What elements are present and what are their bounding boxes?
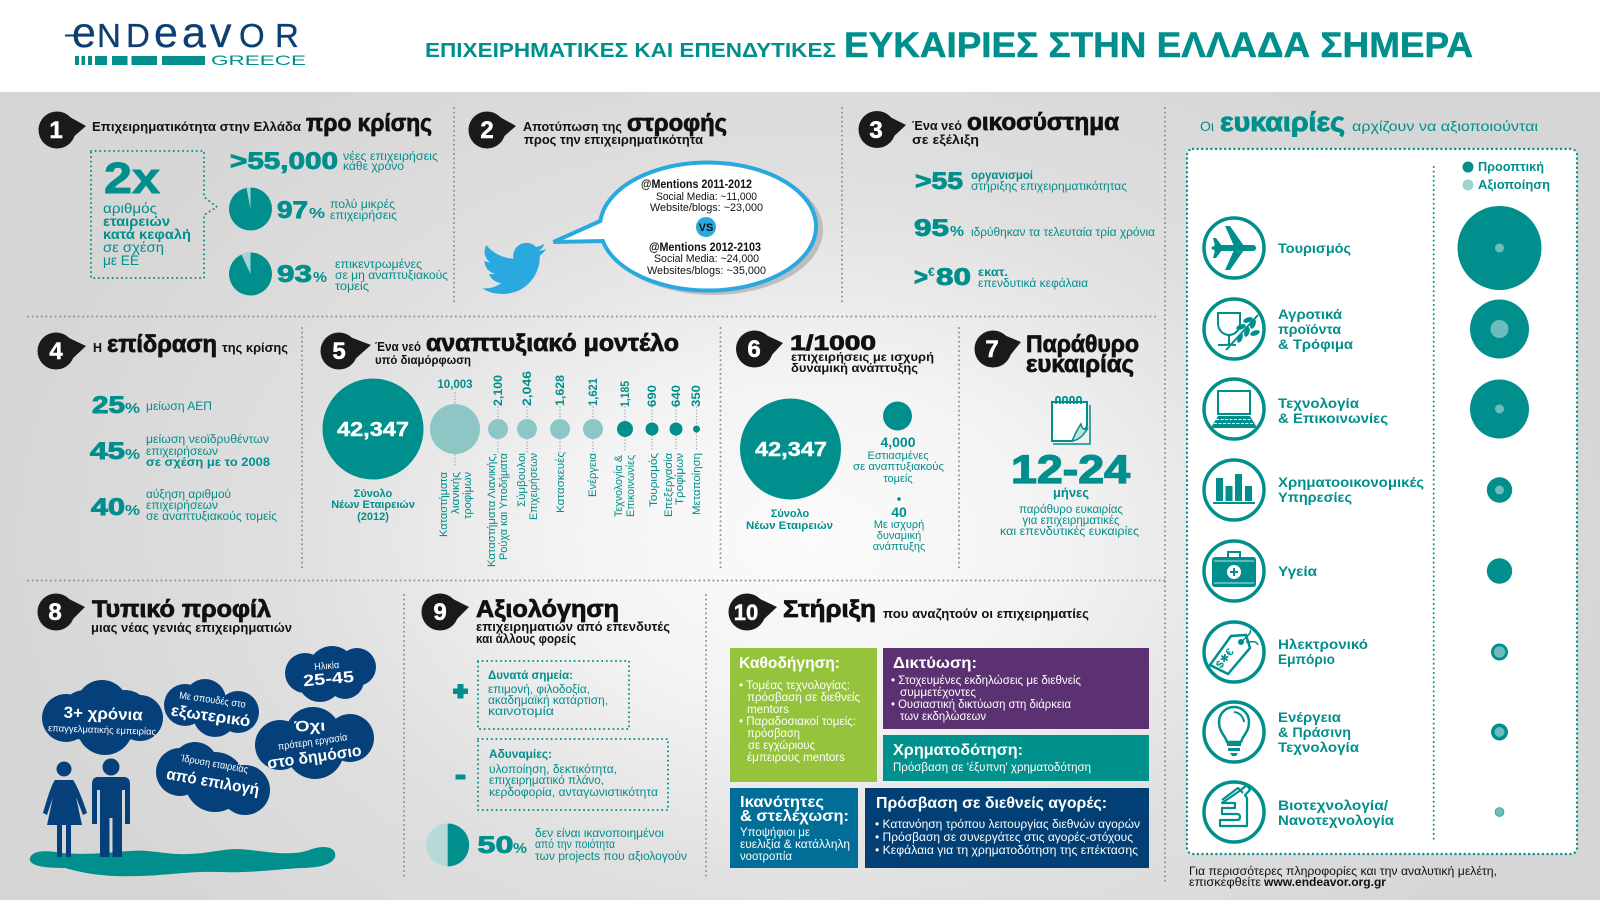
badge 3 [858, 111, 906, 148]
icon: twitter bird [482, 243, 546, 294]
pie: 97%: επιχειρήσεις [330, 210, 397, 222]
heading 5: Ένα νεό [375, 339, 421, 354]
sidebar heading: αρχίζουν να αξιοποιούνται [1352, 118, 1538, 134]
heading 5: αναπτυξιακό μοντέλο [426, 330, 679, 357]
badge 9: 9 [433, 599, 447, 626]
heading 3: οικοσύστημα [967, 109, 1119, 136]
bubble chart: new companies by sector: λιανικής [450, 472, 462, 514]
stat: 45%: σε σχέση με το 2008 [146, 457, 271, 469]
pie: 97% [229, 187, 397, 230]
box: guidance [730, 648, 877, 782]
callout: 2x: με ΕΕ [103, 253, 139, 268]
bubble chart: new companies by sector: Επικοινωνίες [625, 455, 637, 517]
panel 4: impact of the crisis [38, 331, 288, 523]
box: guidance: σε εγχώριους [748, 740, 815, 752]
stat: 80m: 80 [936, 264, 971, 291]
box: financing [883, 735, 1149, 781]
panel 2: twitter mentions [468, 110, 823, 295]
stat: 55 organisations [915, 168, 1127, 195]
bubble chart: new companies by sector: (2012) [357, 511, 389, 523]
total new companies circle [740, 398, 841, 532]
heading 10: που αναζητούν οι επιχειρηματίες [883, 607, 1089, 621]
circle: 4000 focused: τομείς [883, 473, 913, 485]
stat: 12-24 months: 12-24 [1011, 448, 1131, 492]
bubble chart: new companies by sector: Μεταποίηση [691, 453, 703, 515]
callout: 2x: αριθμός [103, 201, 158, 216]
stat: 12-24 months: μήνες [1053, 485, 1089, 500]
row: biotechnology and nanotechnology [1204, 782, 1504, 842]
pie: 50%: 50 [478, 832, 514, 859]
box: networking: • Ουσιαστική δικτύωση στη διάρκεια [891, 699, 1071, 711]
callout: 2x: κατά κεφαλή [103, 227, 191, 242]
box: guidance: πρόσβαση [747, 728, 800, 740]
badge 1: 1 [49, 117, 63, 144]
panel 9: evaluation [422, 594, 687, 866]
stat: 40% [91, 489, 277, 523]
pie: 50%: δεν είναι ικανοποιημένοι [535, 828, 664, 840]
callout: 2x: εταιρειών [103, 214, 170, 229]
bubble chart: new companies by sector: Τουρισμός [648, 453, 660, 507]
badge 10 [728, 594, 777, 630]
weaknesses box: Αδυναμίες: [489, 747, 552, 761]
panel 1: entrepreneurship before the crisis [38, 110, 448, 296]
row: e-commerce [1204, 622, 1508, 682]
heading 6: επιχειρήσεις με ισχυρή [791, 350, 934, 364]
box: skills: & στελέχωση: [740, 808, 849, 825]
heading 2: στροφής [627, 110, 727, 137]
heading 4: της κρίσης [222, 341, 288, 355]
badge 4: 4 [49, 338, 63, 365]
row: biotechnology and nanotechnology: Νανοτεχνολογία [1278, 812, 1394, 828]
stat: 12-24 months: και επενδυτικές ευκαιρίες [1000, 526, 1139, 538]
figure: woman [43, 762, 87, 857]
logo: Endeavor Greece [65, 9, 306, 68]
badge 4 [38, 332, 86, 370]
panel 7: window of opportunity [974, 330, 1139, 538]
row: agri-food: Αγροτικά [1278, 306, 1342, 322]
box: guidance: πρόσβαση σε διεθνείς [747, 692, 860, 704]
badge 9 [422, 594, 469, 630]
cloud: age: 25-45 [302, 669, 355, 690]
row: financial services: Χρηματοοικονομικές [1278, 474, 1424, 490]
cloud: no public sector: Όχι [293, 717, 326, 736]
bubble chart: new companies by sector: Καταστήματα [438, 471, 450, 537]
stat: 95% [914, 215, 1155, 242]
bubble chart: new companies by sector [322, 371, 703, 567]
heading 6: δυναμική ανάπτυξης [791, 361, 918, 375]
cloud: 3+ years: επαγγελματικής εμπειρίας [48, 723, 157, 738]
row: e-commerce: Εμπόριο [1278, 651, 1335, 667]
row: e-commerce: $✱€ [1214, 647, 1237, 671]
callout: 2x: 2x [104, 154, 161, 203]
pie: 93%: 93 [277, 261, 312, 288]
dot: 40 high growth [873, 497, 925, 553]
box: international markets: • Κατανόηση τρόπου λειτουργίας διεθνών αγορών [875, 819, 1140, 831]
stat: 40%: 40 [91, 494, 125, 521]
cloud: startup by choice: Ίδρυση εταιρείας [179, 752, 249, 776]
stat: 80m: εκατ. [978, 267, 1008, 279]
box: international markets [865, 788, 1149, 868]
speech bubble: @Mentions 2012-2103 [649, 242, 761, 254]
total new companies circle: Νέων Εταιρειών [746, 520, 833, 532]
bubble chart: new companies by sector: 1,185 [620, 380, 632, 407]
strengths box: Δυνατά σημεία: [488, 668, 573, 682]
box: networking: • Στοχευμένες εκδηλώσεις με διεθνείς [891, 675, 1081, 687]
speech bubble: VS [699, 222, 713, 234]
heading 7: Παράθυρο [1026, 331, 1139, 358]
stat: 55 organisations: >55 [915, 168, 963, 195]
stat: 25%: μείωση ΑΕΠ [146, 401, 212, 413]
cloud: studies abroad [164, 679, 259, 737]
bubble chart: new companies by sector: Επιχειρήσεων [528, 453, 540, 520]
sidebar heading: Οι [1200, 118, 1214, 134]
title: ΕΠΙΧΕΙΡΗΜΑΤΙΚΕΣ ΚΑΙ ΕΠΕΝΔΥΤΙΚΕΣ [425, 39, 836, 62]
box: international markets: • Κεφάλαια για τη χρηματοδότηση της επέκτασης [875, 845, 1138, 857]
bubble chart: new companies by sector: 690 [647, 385, 659, 407]
panel 8: typical profile [30, 594, 376, 876]
bubble chart: new companies by sector: Νέων Εταιρειών [331, 499, 415, 511]
stat: 55,000 [230, 148, 438, 175]
heading 6: 1/1000 [790, 331, 876, 355]
row: technology and communications: & Επικοινωνίες [1278, 410, 1388, 426]
cloud: no public sector: πρότερη εργασία [277, 731, 348, 753]
panel: opportunities sidebar [1187, 107, 1577, 854]
box: financing: Πρόσβαση σε 'έξυπνη' χρηματοδότηση [893, 762, 1091, 774]
logo: Endeavor Greece: N [97, 17, 121, 54]
box: guidance: mentors [747, 704, 789, 716]
pie: 93%: τομείς [335, 281, 369, 293]
logo: Endeavor Greece: a [182, 9, 206, 57]
circle: 4000 focused: σε αναπτυξιακούς [853, 461, 944, 473]
stat: 45%: μείωση νεοϊδρυθέντων [146, 434, 269, 446]
box: skills: Υποψήφιοι με [740, 827, 810, 839]
heading 6 [790, 331, 934, 375]
legend [1462, 160, 1550, 192]
strengths box: επιμονή, φιλοδοξία, [488, 684, 590, 696]
bubble chart: new companies by sector: 1,621 [588, 377, 600, 406]
stat: 95%: % [950, 223, 964, 240]
heading 4 [93, 331, 288, 358]
cloud: age: Ηλικία [314, 659, 340, 673]
bubble chart: new companies by sector: Επεξεργασία [663, 452, 675, 517]
heading 5 [375, 330, 679, 367]
box: networking: Δικτύωση: [893, 655, 977, 672]
bubble chart: new companies by sector: 1,628 [555, 374, 567, 406]
cloud: startup by choice: από επιλογή [165, 766, 261, 799]
bubble chart: new companies by sector: Ρούχα και Υποδήματα [498, 452, 510, 560]
speech bubble: Social Media: ~24,000 [654, 253, 759, 265]
stat: 25%: 25 [92, 392, 125, 419]
speech bubble: Websites/blogs: ~35,000 [647, 265, 766, 277]
cloud: studies abroad: Με σπουδές στο [178, 689, 247, 711]
cloud: studies abroad: εξωτερικό [170, 703, 252, 731]
cloud: startup by choice [156, 742, 270, 815]
bubble chart: new companies by sector: 2,046 [522, 371, 534, 406]
pie: 93%: % [313, 269, 327, 286]
row: energy and green technology [1204, 702, 1508, 762]
box: skills: ευελιξία & κατάλληλη [740, 839, 850, 851]
legend: Αξιοποίηση [1478, 178, 1550, 192]
row: e-commerce: Ηλεκτρονικό [1278, 636, 1368, 652]
row: tourism: Τουρισμός [1278, 240, 1351, 256]
heading 8: μιας νέας γενιάς επιχειρηματιών [91, 621, 292, 635]
circle: 4000 focused: Εστιασμένες [867, 450, 929, 462]
stat: 45%: % [125, 446, 140, 463]
bubble chart: new companies by sector: Τεχνολογία & [613, 454, 625, 517]
weaknesses box: υλοποίηση, δεκτικότητα, [489, 764, 617, 776]
heading 3: σε εξέλιξη [912, 133, 979, 147]
row: health: Υγεία [1278, 563, 1317, 579]
bubble chart: new companies by sector: Κατασκευές [555, 452, 567, 513]
row: tourism [1204, 206, 1542, 290]
stat: 55,000: κάθε χρόνο [343, 161, 404, 173]
badge 2: 2 [480, 117, 494, 144]
icon: notepad [1052, 397, 1090, 444]
stat: 95%: 95 [914, 215, 949, 242]
box: skills: νοοτροπία [740, 851, 792, 863]
stat: 40%: % [125, 502, 140, 519]
panel 5: new growth model [320, 330, 703, 567]
speech bubble: Social Media: ~11,000 [656, 191, 757, 203]
cloud: 3+ years [42, 680, 163, 755]
heading 10: Στήριξη [783, 596, 876, 623]
heading 4: Η [93, 340, 102, 355]
white sector card [1187, 149, 1577, 854]
cloud: 3+ years: 3+ χρόνια [63, 705, 143, 724]
callout: 2x [91, 151, 217, 278]
stat: 80m: επενδυτικά κεφάλαια [978, 278, 1088, 290]
circle: 4000 focused [853, 402, 944, 485]
footer note: Για περισσότερες πληροφορίες και την αναλυτική μελέτη, [1189, 866, 1497, 878]
stat: 55,000: >55,000 [230, 148, 338, 175]
bubble chart: new companies by sector: 42,347 [337, 419, 409, 441]
bubble chart: new companies by sector: 2,100 [493, 375, 505, 406]
heading 1: προ κρίσης [306, 110, 432, 137]
pie: 93% [229, 252, 448, 296]
row: agri-food [1204, 299, 1529, 359]
cloud: age [285, 646, 376, 702]
row: financial services [1204, 460, 1512, 520]
pie: 50% [426, 824, 687, 866]
stat: 80m [914, 264, 1088, 291]
box: networking [883, 648, 1149, 729]
box: guidance: Καθοδήγηση: [739, 655, 840, 672]
heading 7: ευκαιρίας [1026, 351, 1134, 378]
box: international markets: • Πρόσβαση σε συνεργάτες στις αγορές-στόχους [875, 832, 1133, 844]
box: guidance: έμπειρους mentors [747, 752, 845, 764]
pie: 97%: 97 [277, 197, 308, 224]
row: agri-food: προϊόντα [1278, 321, 1341, 337]
badge 8 [38, 594, 85, 630]
heading 1: Επιχειρηματικότητα στην Ελλάδα [92, 119, 301, 134]
speech bubble: Website/blogs: ~23,000 [650, 202, 763, 214]
stat: 25% [92, 392, 212, 419]
stat: 25%: % [125, 400, 140, 417]
speech bubble [554, 163, 823, 295]
weaknesses box: κερδοφορία, ανταγωνιστικότητα [489, 787, 658, 799]
title: ΕΥΚΑΙΡΙΕΣ ΣΤΗΝ ΕΛΛΑΔΑ ΣΗΜΕΡΑ [844, 26, 1473, 65]
heading 5: υπό διαμόρφωση [375, 353, 471, 367]
heading 2: προς την επιχειρηματικότητα [524, 133, 703, 147]
ground [30, 847, 335, 876]
logo: Endeavor Greece: e [154, 9, 178, 57]
dot: 40 high growth: δυναμική [877, 530, 921, 542]
bubble chart: new companies by sector: Σύμβουλοι [516, 452, 528, 507]
heading 9: Αξιολόγηση [476, 596, 619, 623]
badge 10: 10 [734, 600, 758, 625]
badge 6 [736, 330, 783, 368]
box: international markets: Πρόσβαση σε διεθνείς αγορές: [876, 795, 1107, 812]
box: financing: Χρηματοδότηση: [893, 742, 1023, 759]
pie: 97%: % [309, 205, 325, 222]
dot: 40 high growth: ανάπτυξης [873, 541, 925, 553]
badge 7 [974, 330, 1021, 368]
box: skills: Ικανότητες [740, 794, 824, 811]
bubble chart: new companies by sector: Τροφίμων [674, 452, 686, 505]
legend: Προοπτική [1478, 160, 1544, 174]
row: technology and communications [1204, 379, 1529, 439]
stat: 55 organisations: στήριξης επιχειρηματικότητας [971, 181, 1127, 193]
title [425, 26, 1473, 65]
heading 4: επίδραση [107, 331, 217, 358]
row: agri-food: & Τρόφιμα [1278, 336, 1353, 352]
box: guidance: • Τομέας τεχνολογίας: [739, 680, 850, 692]
circle: 4000 focused: 4,000 [880, 434, 916, 450]
stat: 40%: αύξηση αριθμού [146, 489, 231, 501]
bubble chart: new companies by sector: Καταστήματα Λιανικής, [486, 453, 498, 567]
stat: 12-24 months: για επιχειρηματικές [1022, 515, 1120, 527]
stat: 45%: 45 [90, 438, 125, 465]
heading 7 [1026, 331, 1139, 378]
row: energy and green technology: & Πράσινη [1278, 724, 1351, 740]
bubble chart: new companies by sector: 640 [671, 385, 683, 407]
heading 2: Αποτύπωση της [523, 119, 622, 134]
pie: 50%: των projects που αξιολογούν [535, 851, 687, 863]
badge 7: 7 [985, 336, 999, 363]
stat: 55 organisations: οργανισμοί [971, 170, 1033, 182]
logo: Endeavor Greece: O [239, 17, 265, 54]
row: biotechnology and nanotechnology: Βιοτεχνολογία/ [1278, 797, 1388, 813]
callout: 2x: σε σχέση [103, 240, 164, 255]
bubble chart: new companies by sector: Ενέργεια [587, 452, 599, 497]
footer note [1189, 866, 1497, 889]
panel 3: ecosystem [858, 109, 1155, 291]
row: energy and green technology: Τεχνολογία [1278, 739, 1359, 755]
stat: 95%: ιδρύθηκαν τα τελευταία τρία χρόνια [971, 227, 1155, 239]
row: energy and green technology: Ενέργεια [1278, 709, 1341, 725]
panel 10: support [728, 594, 1149, 868]
box: skills [730, 788, 858, 868]
heading 2 [523, 110, 727, 147]
heading 1 [92, 110, 432, 137]
heading 8: Τυπικό προφίλ [92, 596, 271, 623]
stat: 12-24 months [1000, 448, 1139, 538]
strengths box: καινοτομία [488, 706, 554, 718]
stat: 40%: σε αναπτυξιακούς τομείς [146, 511, 277, 523]
stat: 12-24 months: παράθυρο ευκαιρίας [1019, 504, 1123, 516]
sidebar heading [1200, 107, 1538, 137]
total new companies circle: Σύνολο [771, 508, 810, 520]
logo: Endeavor Greece: GREECE [211, 52, 306, 68]
footer note: www.endeavor.org.gr [1263, 877, 1387, 889]
stat: 80m: > [914, 264, 928, 291]
pie: 97%: πολύ μικρές [330, 199, 395, 211]
logo: Endeavor Greece: v [210, 9, 232, 57]
heading 10 [783, 596, 1089, 623]
logo: Endeavor Greece: R [275, 17, 299, 54]
strengths box: ακαδημαϊκή κατάρτιση, [488, 695, 608, 707]
pie: 93%: επικεντρωμένες [335, 259, 422, 271]
pie: 50%: από την ποιότητα [535, 839, 615, 851]
box: guidance: • Παραδοσιακοί τομείς: [739, 716, 856, 728]
heading 9 [476, 596, 670, 646]
bubble chart: new companies by sector: Σύνολο [354, 488, 393, 500]
bubble chart: new companies by sector: τροφίμων [462, 472, 474, 519]
figure: man [92, 758, 130, 857]
badge 5 [320, 332, 371, 370]
stat: 45% [90, 434, 271, 469]
pie: 50%: % [513, 840, 527, 857]
strengths box [453, 661, 629, 729]
heading 9: επιχειρηματιών από επενδυτές [476, 620, 670, 634]
pie: 93%: σε μη αναπτυξιακούς [335, 270, 448, 282]
badge 3: 3 [869, 117, 883, 144]
bubble chart: new companies by sector: 10,003 [437, 379, 473, 391]
row: health [1204, 541, 1512, 601]
weaknesses box [456, 739, 668, 810]
heading 9: και άλλους φορείς [476, 632, 576, 646]
sidebar heading: ευκαιρίες [1220, 107, 1345, 137]
box: networking: συμμετέχοντες [900, 687, 976, 699]
heading 8 [91, 596, 292, 635]
row: financial services: Υπηρεσίες [1278, 489, 1352, 505]
badge 1 [38, 112, 86, 148]
bubble chart: new companies by sector: 350 [691, 385, 703, 407]
row: technology and communications: Τεχνολογία [1278, 395, 1359, 411]
box: networking: των εκδηλώσεων [900, 711, 986, 723]
dot: 40 high growth: 40 [891, 504, 907, 520]
weaknesses box: επιχειρηματικό πλάνο, [489, 775, 604, 787]
total new companies circle: 42,347 [755, 439, 827, 461]
heading 3 [912, 109, 1119, 147]
stat: 80m: € [928, 265, 935, 279]
stat: 55,000: νέες επιχειρήσεις [343, 151, 438, 163]
badge 6: 6 [747, 336, 761, 363]
cloud: no public sector: στο δημόσιο [266, 742, 363, 773]
panel 6: 1 in 1000 [736, 330, 944, 553]
badge 8: 8 [48, 599, 62, 626]
speech bubble: @Mentions 2011-2012 [641, 179, 752, 191]
footer note: επισκεφθείτε [1189, 877, 1261, 889]
badge 5: 5 [332, 338, 346, 365]
badge 2 [468, 112, 516, 148]
stat: 40%: επιχειρήσεων [146, 500, 218, 512]
logo: Endeavor Greece: e [72, 9, 96, 57]
stat: 45%: επιχειρήσεων [146, 446, 218, 458]
heading 3: Ένα νεό [912, 118, 962, 133]
dot: 40 high growth: Με ισχυρή [874, 519, 924, 531]
logo: Endeavor Greece: D [126, 17, 150, 54]
cloud: no public sector [255, 707, 374, 779]
